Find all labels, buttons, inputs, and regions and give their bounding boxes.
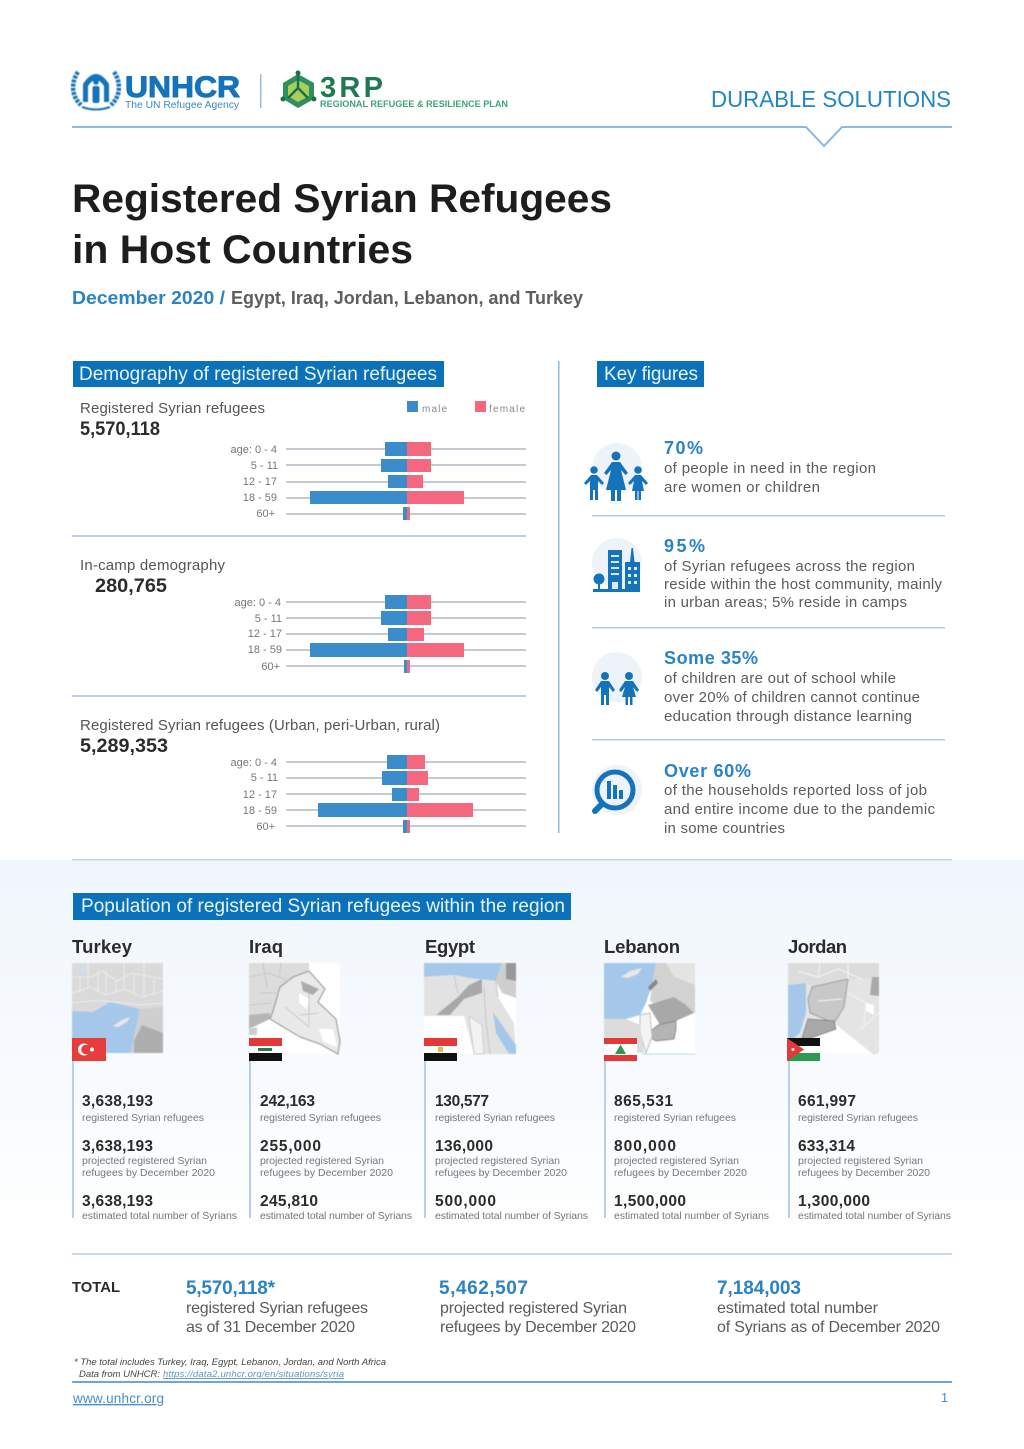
icon: children	[592, 652, 642, 705]
stat: 60%: Over 60%	[664, 761, 751, 781]
flag: Turkey	[72, 1038, 106, 1061]
subtitle	[72, 288, 583, 308]
heading: demography: Demography of registered Syrian refugees	[79, 364, 437, 385]
stats: Iraq	[260, 1093, 412, 1222]
bar chart: in-camp by age: 12 - 17	[248, 628, 282, 640]
total label: TOTAL	[72, 1279, 120, 1296]
stat: 70%: 70%	[664, 438, 703, 458]
stats: Lebanon: projected registered Syrian	[614, 1155, 739, 1167]
country: Jordan: Jordan	[788, 936, 847, 957]
stat: 70%: of people in need in the region	[664, 460, 876, 477]
chart heading: urban	[80, 717, 440, 757]
panel: population by country	[72, 893, 951, 1222]
legend: female	[489, 404, 525, 415]
chart heading: in-camp: In-camp demography	[80, 557, 226, 574]
total: projected: projected registered Syrian	[440, 1300, 627, 1317]
country: Jordan	[787, 936, 951, 1222]
bar chart: urban by age: age: 0 - 4	[231, 757, 277, 769]
bar chart: registered refugees by age	[231, 442, 526, 520]
subtitle: December 2020 /	[72, 288, 225, 308]
section tag: DURABLE SOLUTIONS	[711, 86, 951, 112]
total: estimated: estimated total number	[717, 1300, 879, 1317]
footnote	[74, 1357, 386, 1380]
country: Turkey	[72, 936, 237, 1222]
country: Iraq	[249, 936, 412, 1222]
stat: 95%	[664, 536, 942, 611]
stats: Jordan: estimated total number of Syrians	[798, 1210, 951, 1222]
total: projected	[439, 1278, 636, 1336]
stats: Jordan: projected registered Syrian	[798, 1155, 923, 1167]
heading: key figures: Key figures	[604, 364, 698, 385]
total: registered: registered Syrian refugees	[186, 1300, 368, 1317]
stats: Jordan: 1,300,000	[798, 1193, 870, 1210]
stats: Iraq: estimated total number of Syrians	[260, 1210, 412, 1222]
bar chart: in-camp by age: age: 0 - 4	[235, 597, 281, 609]
stats: Turkey: projected registered Syrian	[82, 1155, 207, 1167]
stats: Turkey	[82, 1093, 237, 1222]
stat: 35%: Some 35%	[664, 648, 758, 668]
stat: 60%: of the households reported loss of job	[664, 782, 927, 799]
total: projected: refugees by December 2020	[440, 1319, 636, 1336]
bar chart: registered refugees by age: age: 0 - 4	[231, 444, 277, 456]
stat: 60%: in some countries	[664, 820, 785, 837]
total: registered: 5,570,118*	[186, 1278, 276, 1299]
header: logos and section tag	[72, 70, 952, 146]
chart heading: urban: 5,289,353	[80, 736, 168, 757]
stats: Jordan: refugees by December 2020	[798, 1167, 930, 1179]
stat: 60%	[664, 761, 936, 837]
stat: 95%: in urban areas; 5% reside in camps	[664, 594, 907, 611]
bar chart: in-camp by age	[235, 595, 526, 673]
logo separator	[260, 74, 262, 108]
subtitle: Egypt, Iraq, Jordan, Lebanon, and Turkey	[231, 288, 583, 308]
panel: key figures	[584, 361, 945, 837]
icon: woman and children	[584, 443, 648, 501]
country: Egypt: Egypt	[425, 936, 475, 957]
bar chart: in-camp by age: 18 - 59	[248, 644, 282, 656]
bar chart: registered refugees by age: 12 - 17	[243, 476, 277, 488]
chart heading: urban: Registered Syrian refugees (Urban, peri-Urban, rural)	[80, 717, 440, 734]
total: registered	[186, 1278, 368, 1336]
UNHCR wordmark: UNHCR	[125, 71, 240, 104]
bar chart: urban by age: 12 - 17	[243, 789, 277, 801]
icon: UNHCR emblem	[73, 72, 119, 110]
footer link: www.unhcr.org	[72, 1391, 164, 1406]
footnote: https://data2.unhcr.org/en/situations/syria	[163, 1369, 344, 1380]
country: Turkey: Turkey	[72, 936, 133, 957]
map: Turkey	[72, 963, 163, 1053]
legend	[407, 401, 525, 415]
footnote: * The total includes Turkey, Iraq, Egypt, Lebanon, Jordan, and North Africa	[74, 1357, 386, 1368]
stats: Iraq: 245,810	[260, 1193, 318, 1210]
footnote: Data from UNHCR:	[79, 1369, 160, 1380]
title: in Host Countries	[72, 228, 413, 272]
stats: Turkey: refugees by December 2020	[82, 1167, 215, 1179]
total: registered: as of 31 December 2020	[186, 1319, 355, 1336]
stats: Egypt: 136,000	[435, 1138, 493, 1155]
bar chart: registered refugees by age: 18 - 59	[243, 492, 277, 504]
stats: Jordan	[798, 1093, 951, 1222]
panel: totals	[72, 1278, 940, 1336]
title: Registered Syrian Refugees	[72, 177, 612, 221]
map: Iraq	[249, 963, 340, 1054]
stats: Egypt: 500,000	[435, 1193, 496, 1210]
stats: Lebanon: 1,500,000	[614, 1193, 686, 1210]
stats: Egypt: projected registered Syrian	[435, 1155, 560, 1167]
flag: Egypt	[424, 1038, 457, 1061]
stats: Lebanon	[614, 1093, 769, 1222]
stats: Turkey: 3,638,193	[82, 1193, 153, 1210]
stats: Iraq: 255,000	[260, 1138, 321, 1155]
stats: Iraq: 242,163	[260, 1093, 315, 1110]
chart heading: registered: Registered Syrian refugees	[80, 400, 265, 417]
stats: Lebanon: registered Syrian refugees	[614, 1112, 736, 1124]
bar chart: registered refugees by age: 5 - 11	[251, 460, 278, 472]
3RP wordmark: 3RP	[320, 72, 383, 104]
stat: 35%: over 20% of children cannot continue	[664, 689, 920, 706]
stats: Iraq: registered Syrian refugees	[260, 1112, 381, 1124]
stats: Egypt: refugees by December 2020	[435, 1167, 567, 1179]
flag: Jordan	[787, 1038, 820, 1061]
chart heading: in-camp: 280,765	[95, 576, 167, 597]
stats: Egypt	[435, 1093, 588, 1222]
panel: demography	[72, 361, 526, 833]
page number: 1	[941, 1391, 948, 1405]
stats: Jordan: registered Syrian refugees	[798, 1112, 918, 1124]
flag: Lebanon	[604, 1038, 637, 1061]
bar chart: urban by age: 60+	[256, 821, 275, 833]
total: projected: 5,462,507	[439, 1278, 528, 1299]
stats: Lebanon: 865,531	[614, 1093, 673, 1110]
stats: Iraq: projected registered Syrian	[260, 1155, 384, 1167]
bar chart: registered refugees by age: 60+	[256, 508, 275, 520]
stats: Lebanon: refugees by December 2020	[614, 1167, 747, 1179]
stats: Egypt: registered Syrian refugees	[435, 1112, 555, 1124]
icon: 3RP emblem	[280, 70, 316, 108]
country: Lebanon	[604, 936, 769, 1222]
stats: Jordan: 633,314	[798, 1138, 855, 1155]
stat: 70%	[664, 438, 876, 496]
stat: 95%: reside within the host community, mainly	[664, 576, 942, 593]
stat: 70%: are women or children	[664, 479, 820, 496]
stats: Turkey: 3,638,193	[82, 1138, 153, 1155]
stats: Iraq: refugees by December 2020	[260, 1167, 393, 1179]
stats: Lebanon: estimated total number of Syrians	[614, 1210, 769, 1222]
total: estimated	[717, 1278, 940, 1336]
3RP tagline: REGIONAL REFUGEE & RESILIENCE PLAN	[320, 99, 508, 110]
bar chart: urban by age	[231, 755, 526, 833]
country: Lebanon: Lebanon	[604, 936, 680, 957]
bar chart: in-camp by age: 5 - 11	[255, 613, 282, 625]
stats: Jordan: 661,997	[798, 1093, 856, 1110]
bar chart: urban by age: 5 - 11	[251, 772, 278, 784]
map: Egypt	[424, 963, 516, 1054]
flag: Iraq	[249, 1038, 282, 1061]
bar chart: in-camp by age: 60+	[261, 661, 280, 673]
stats: Egypt: estimated total number of Syrians	[435, 1210, 588, 1222]
stat: 35%	[664, 648, 920, 725]
stats: Turkey: estimated total number of Syrians	[82, 1210, 237, 1222]
map: Lebanon	[604, 963, 695, 1054]
chart heading: in-camp	[80, 557, 226, 597]
stat: 60%: and entire income due to the pandemic	[664, 801, 936, 818]
legend: male	[422, 404, 447, 415]
title	[72, 177, 612, 272]
bar chart: urban by age: 18 - 59	[243, 805, 277, 817]
stats: Turkey: 3,638,193	[82, 1093, 153, 1110]
total: estimated: of Syrians as of December 2020	[717, 1319, 940, 1336]
total: estimated: 7,184,003	[717, 1278, 801, 1299]
map: Jordan	[788, 963, 879, 1055]
UNHCR tagline: The UN Refugee Agency	[125, 100, 239, 111]
stat: 35%: education through distance learning	[664, 708, 912, 725]
header rule with notch	[72, 127, 952, 146]
stats: Turkey: registered Syrian refugees	[82, 1112, 204, 1124]
stats: Lebanon: 800,000	[614, 1138, 676, 1155]
country: Egypt	[424, 936, 588, 1222]
stat: 95%: 95%	[664, 536, 705, 556]
icon: magnifier with chart	[592, 765, 642, 815]
country: Iraq: Iraq	[249, 936, 283, 957]
chart heading: registered: 5,570,118	[80, 419, 160, 440]
stats: Egypt: 130,577	[435, 1093, 489, 1110]
heading: population: Population of registered Syrian refugees within the region	[81, 896, 565, 917]
stat: 35%: of children are out of school while	[664, 670, 896, 687]
chart heading: registered	[80, 400, 265, 440]
icon: city	[592, 538, 642, 592]
stat: 95%: of Syrian refugees across the region	[664, 558, 915, 575]
